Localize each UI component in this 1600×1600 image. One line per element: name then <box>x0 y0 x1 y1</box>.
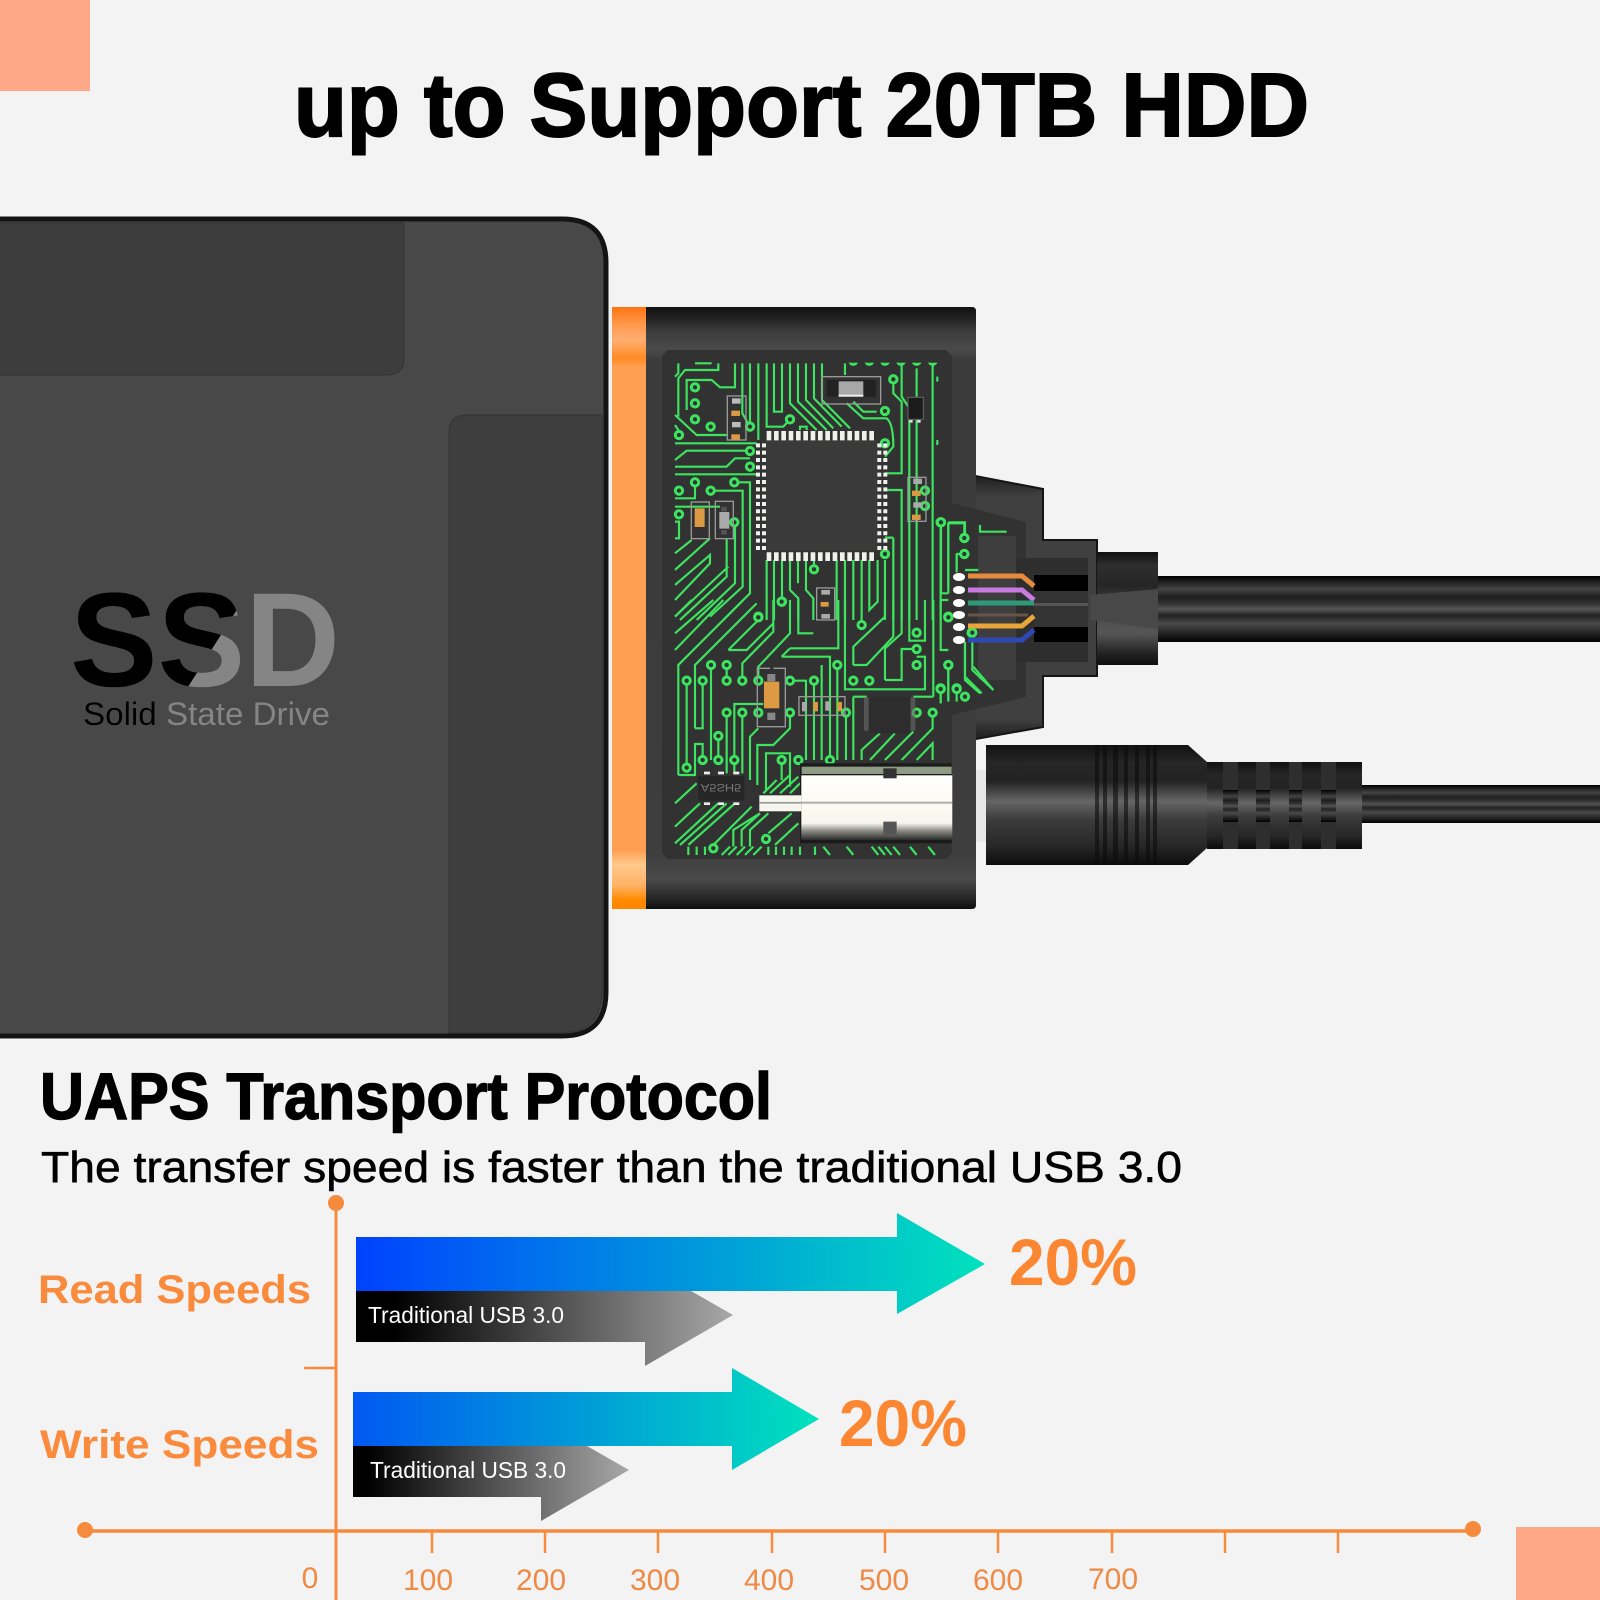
plug pin <box>976 770 986 842</box>
PCB traces upper half <box>675 350 968 620</box>
transistor top <box>822 377 881 404</box>
upper label recess <box>0 223 404 375</box>
outer strain relief <box>970 475 1097 740</box>
write traditional label: Traditional USB 3.0 <box>370 1457 566 1483</box>
main controller chip <box>756 431 887 561</box>
x axis labels: 400 <box>744 1564 794 1597</box>
PCB vias near cable <box>937 519 976 693</box>
strain relief core <box>1207 762 1362 849</box>
SSD logo: SSD <box>70 566 340 715</box>
orange band <box>612 307 646 909</box>
write arrow <box>353 1368 819 1470</box>
drive body <box>0 219 606 1036</box>
x axis labels: 300 <box>630 1564 680 1597</box>
wire purple <box>968 590 1034 600</box>
speed bar chart <box>38 1195 1481 1600</box>
plug barrel <box>986 745 1207 865</box>
x axis labels <box>302 1562 1138 1597</box>
wire orange <box>968 576 1034 586</box>
read arrow <box>356 1213 985 1314</box>
write percent: 20% <box>839 1386 967 1460</box>
decorative corner square top left <box>0 0 90 91</box>
small ic top right <box>908 397 923 423</box>
strain relief segments <box>1207 762 1362 849</box>
cable strain relief housing <box>970 475 1158 740</box>
read traditional label: Traditional USB 3.0 <box>368 1302 564 1328</box>
x axis labels: 0 <box>302 1562 318 1595</box>
capacitors left <box>691 501 733 539</box>
decorative corner square bottom right <box>1516 1527 1600 1600</box>
right side label recess <box>449 415 602 1033</box>
title: up to Support 20TB HDD <box>294 56 1309 156</box>
x axis labels: 500 <box>859 1564 909 1597</box>
resistors center <box>817 588 835 620</box>
collar <box>1097 552 1158 665</box>
resistors left upper <box>727 396 746 440</box>
axes <box>85 1203 1473 1600</box>
section subheading: The transfer speed is faster than the traditional USB 3.0 <box>41 1143 1182 1192</box>
logo subtitle: Solid State Drive <box>83 696 330 732</box>
logo subtitle <box>84 702 328 726</box>
read percent: 20% <box>1009 1225 1137 1299</box>
large capacitor <box>757 668 785 727</box>
resistor array <box>799 697 845 715</box>
DC power plug <box>976 745 1362 865</box>
write traditional arrow <box>353 1446 629 1521</box>
connector block <box>978 536 1016 680</box>
wire brown <box>968 614 1028 616</box>
collar facet <box>1090 589 1158 629</box>
axis dots <box>77 1195 1481 1538</box>
marked ic A5SH5 <box>698 772 744 805</box>
wire green <box>968 600 1034 606</box>
read traditional arrow <box>356 1291 733 1366</box>
solder points <box>953 573 965 644</box>
adapter housing <box>612 307 1088 909</box>
read speeds label: Read Speeds <box>38 1268 311 1312</box>
SSD logo: SSD <box>70 566 340 715</box>
PCB traces near cable <box>941 522 1007 703</box>
wire blue <box>968 630 1034 640</box>
power cable <box>1355 785 1600 823</box>
SSD drive <box>0 219 606 1036</box>
colored cable wires <box>968 576 1034 640</box>
x axis labels: 200 <box>516 1564 566 1597</box>
wire yellow <box>968 616 1034 626</box>
write speeds label: Write Speeds <box>40 1423 319 1467</box>
x axis labels: 600 <box>973 1564 1023 1597</box>
resistors right <box>908 477 926 521</box>
PCB plate <box>662 350 1088 859</box>
silver socket <box>759 763 952 843</box>
dark housing <box>646 307 976 909</box>
PCB traces lower half <box>675 598 993 855</box>
barrel ribs <box>1095 745 1157 865</box>
SSD logo <box>74 592 334 688</box>
inner cable channel <box>1016 558 1088 662</box>
section heading: UAPS Transport Protocol <box>40 1059 772 1133</box>
dark ic lower right <box>864 697 915 733</box>
USB cable <box>1150 576 1600 642</box>
x axis labels: 700 <box>1088 1563 1138 1596</box>
x axis labels: 100 <box>403 1564 453 1597</box>
top edge mask <box>847 350 940 363</box>
marked ic A5SH5: A5SH5 <box>701 781 741 793</box>
logo subtitle: Solid State Drive <box>83 696 330 732</box>
